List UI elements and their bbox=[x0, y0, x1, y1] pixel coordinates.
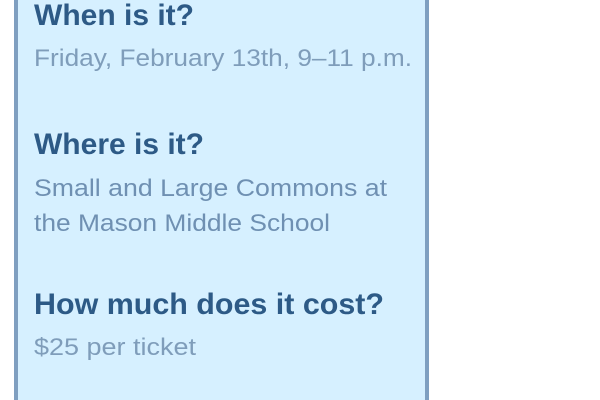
panel: event details bbox=[16, 0, 427, 400]
heading: where: Where is it? bbox=[34, 128, 204, 161]
text: location: Small and Large Commons at bbox=[34, 175, 387, 202]
heading: cost: How much does it cost? bbox=[34, 288, 384, 321]
text: location bbox=[34, 175, 387, 237]
text: price: $25 per ticket bbox=[34, 334, 196, 361]
text: date and time: Friday, February 13th, 9–11 p.m. bbox=[34, 45, 412, 72]
text: location: the Mason Middle School bbox=[34, 210, 330, 237]
